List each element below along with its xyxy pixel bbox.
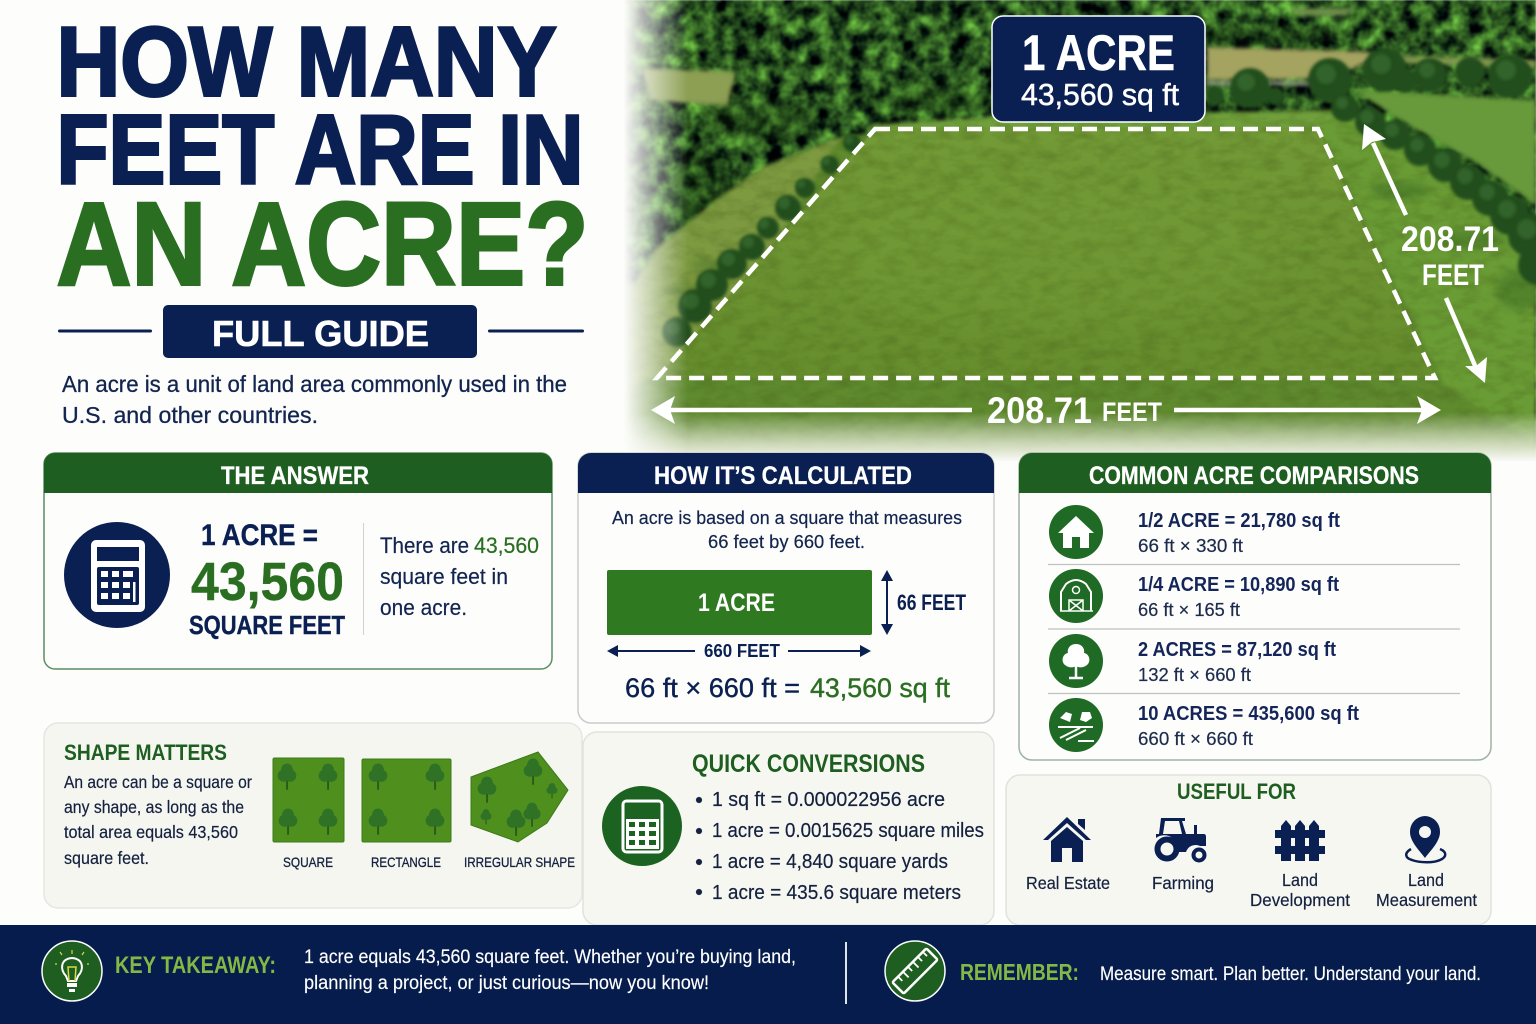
item: real estate: Real Estate — [1026, 873, 1110, 893]
title — [56, 6, 588, 310]
badge: full guide — [58, 305, 584, 358]
conversion list: 1 acre = 435.6 square meters — [712, 882, 961, 904]
title: AN ACRE? — [56, 178, 588, 310]
row: ten acres: 660 ft × 660 ft — [1138, 729, 1253, 749]
item: land development: Land — [1282, 870, 1318, 890]
panel: shape matters — [44, 723, 582, 908]
body text: any shape, as long as the — [64, 797, 244, 817]
answer value — [189, 519, 345, 640]
conversion list: 1 acre = 0.0015625 square miles — [712, 820, 984, 842]
icon: ruler — [885, 941, 945, 1001]
item: farming — [1152, 818, 1214, 893]
item: land measurement: Land — [1408, 870, 1444, 890]
badge: full guide: FULL GUIDE — [212, 313, 429, 354]
shape: rectangle — [362, 759, 451, 870]
arrow: side length 208.71 feet — [1362, 124, 1499, 383]
row: quarter acre — [1049, 569, 1339, 623]
item: land development — [1250, 820, 1350, 910]
conversion list: 1 acre = 4,840 square yards — [712, 851, 948, 873]
key takeaway text: 1 acre equals 43,560 square feet. Whether you’re buying land, — [304, 947, 796, 968]
panel: the answer — [44, 453, 552, 669]
item: real estate — [1026, 817, 1110, 893]
diagram: 1 acre rectangle: 66 FEET — [897, 590, 966, 615]
row: half acre: 66 ft × 330 ft — [1138, 536, 1243, 556]
key takeaway text — [304, 947, 796, 994]
icon: calculator — [602, 786, 682, 866]
answer explanation — [380, 533, 539, 620]
answer explanation: square feet in — [380, 564, 508, 589]
answer explanation: one acre. — [380, 595, 467, 620]
row: two acres: 132 ft × 660 ft — [1138, 665, 1251, 685]
row: ten acres: 10 ACRES = 435,600 sq ft — [1138, 703, 1359, 725]
formula: 43,560 sq ft — [810, 673, 950, 703]
key takeaway label: KEY TAKEAWAY: — [115, 952, 276, 979]
body text: total area equals 43,560 — [64, 822, 238, 842]
boundary: dashed 1 acre outline — [657, 129, 1435, 378]
shape: square — [273, 758, 344, 870]
title: HOW MANY — [56, 6, 556, 116]
panel: quick conversions — [583, 732, 994, 925]
arrow: side length 208.71 feet: FEET — [1422, 259, 1484, 292]
row: half acre: 1/2 ACRE = 21,780 sq ft — [1138, 510, 1340, 532]
row: quarter acre: 1/4 ACRE = 10,890 sq ft — [1138, 574, 1339, 596]
body text: An acre can be a square or — [64, 772, 252, 792]
key takeaway text: planning a project, or just curious—now you know! — [304, 973, 709, 994]
row: two acres: 2 ACRES = 87,120 sq ft — [1138, 639, 1336, 661]
title: FEET ARE IN — [56, 94, 584, 204]
description — [612, 507, 962, 552]
formula: 66 ft × 660 ft = — [625, 673, 800, 703]
arrow: bottom width 208.71 feet: FEET — [1102, 397, 1162, 427]
intro text: U.S. and other countries. — [62, 402, 318, 428]
item: farming: Farming — [1152, 873, 1214, 893]
conversion list: 1 sq ft = 0.000022956 acre — [712, 789, 945, 811]
diagram: 1 acre rectangle: 660 FEET — [704, 640, 781, 661]
answer explanation: There are — [380, 533, 469, 558]
icon: light bulb — [42, 941, 102, 1001]
arrow: bottom width 208.71 feet: 208.71 — [987, 390, 1092, 431]
diagram: 1 acre rectangle — [607, 570, 966, 661]
footer banner — [0, 925, 1536, 1024]
conversion list — [696, 789, 984, 904]
aerial photo of field — [590, 0, 1536, 462]
callout: 1 acre: 1 ACRE — [1022, 25, 1175, 81]
row: ten acres — [1049, 698, 1359, 752]
arrow: bottom width 208.71 feet — [651, 390, 1441, 431]
remember label: REMEMBER: — [960, 959, 1079, 985]
answer explanation: 43,560 — [474, 533, 539, 558]
diagram: 1 acre rectangle: 1 ACRE — [698, 589, 775, 617]
shape: rectangle: RECTANGLE — [371, 854, 441, 870]
shape: square: SQUARE — [283, 854, 333, 870]
body text: square feet. — [64, 848, 149, 868]
description: 66 feet by 660 feet. — [708, 531, 865, 552]
panel: how it's calculated — [578, 453, 994, 723]
shape: irregular — [464, 752, 575, 870]
panel: common acre comparisons — [1019, 453, 1491, 760]
answer value: 43,560 — [191, 552, 344, 612]
heading: useful for: USEFUL FOR — [1177, 779, 1296, 804]
heading: quick conversions: QUICK CONVERSIONS — [692, 750, 925, 778]
remember text: Measure smart. Plan better. Understand your land. — [1100, 964, 1481, 985]
heading: shape matters: SHAPE MATTERS — [64, 740, 227, 765]
heading: comparisons: COMMON ACRE COMPARISONS — [1089, 462, 1419, 490]
shape: irregular: IRREGULAR SHAPE — [464, 854, 575, 870]
item: land measurement: Measurement — [1376, 890, 1477, 910]
answer value: SQUARE FEET — [189, 610, 345, 640]
callout: 1 acre — [992, 16, 1205, 122]
answer value: 1 ACRE = — [201, 519, 318, 552]
panel: useful for — [1006, 775, 1491, 925]
body text — [64, 772, 252, 868]
description: An acre is based on a square that measures — [612, 507, 962, 528]
heading: how it's calculated: HOW IT’S CALCULATED — [654, 462, 912, 490]
arrow: side length 208.71 feet: 208.71 — [1401, 220, 1499, 259]
icon: calculator — [64, 522, 170, 628]
row: quarter acre: 66 ft × 165 ft — [1138, 600, 1240, 620]
item: land measurement — [1376, 816, 1477, 910]
intro text: An acre is a unit of land area commonly used in the — [62, 371, 567, 397]
formula — [625, 673, 950, 703]
row: half acre — [1049, 505, 1340, 559]
row: two acres — [1049, 634, 1336, 688]
item: land development: Development — [1250, 890, 1350, 910]
heading: the answer: THE ANSWER — [221, 462, 369, 490]
callout: 1 acre: 43,560 sq ft — [1021, 77, 1179, 112]
intro text — [62, 371, 567, 428]
